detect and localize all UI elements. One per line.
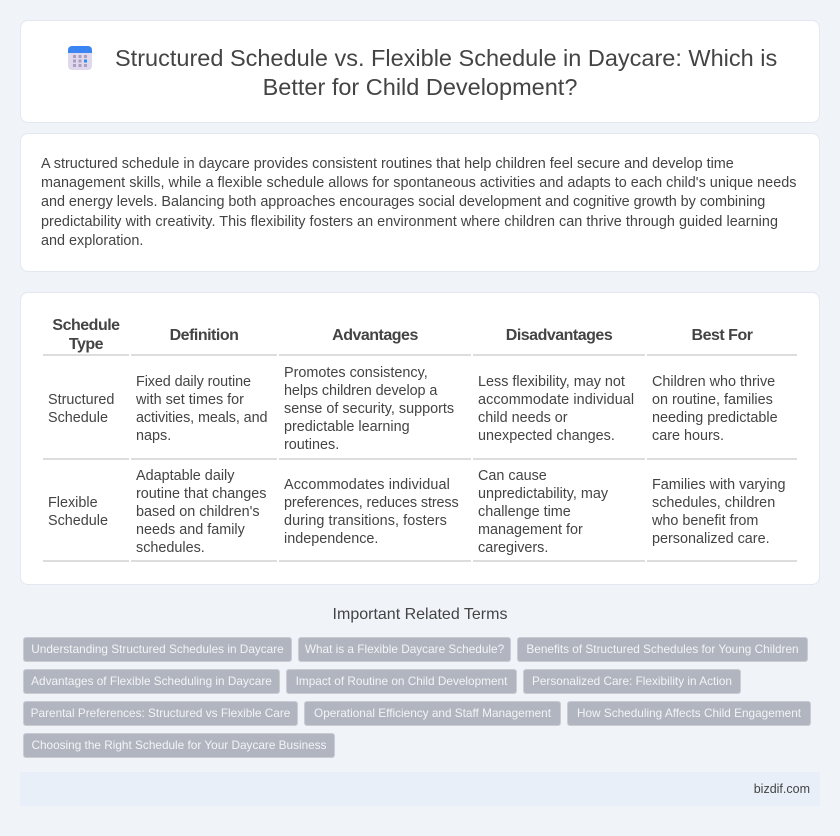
table row: structured schedule: naps. [136, 428, 171, 444]
title: Better for Child Development? [263, 74, 577, 100]
related term tags: Advantages of Flexible Scheduling in Daycare [31, 674, 272, 688]
table row: flexible schedule: preferences, reduces stress [284, 495, 459, 511]
footer bar [20, 772, 820, 806]
table header row: Schedule [52, 317, 120, 334]
table row: structured schedule: needing predictable [652, 410, 778, 426]
table header row: Disadvantages [506, 327, 612, 344]
table row: flexible schedule: based on children's [136, 504, 260, 520]
table row: structured schedule: unexpected changes. [478, 428, 615, 444]
table row: flexible schedule: routine that changes [136, 486, 266, 502]
table row: structured schedule: care hours. [652, 428, 724, 444]
table row: structured schedule: predictable learning [284, 419, 410, 435]
table row: structured schedule: Schedule [48, 410, 108, 426]
table row: flexible schedule: management for [478, 522, 583, 538]
related term tags: Benefits of Structured Schedules for Young Children [526, 642, 799, 656]
intro text: A structured schedule in daycare provides consistent routines that help children feel secure and develop time [41, 156, 734, 172]
table row: flexible schedule: Adaptable daily [136, 468, 234, 484]
footer source text: bizdif.com [754, 782, 810, 796]
table row: flexible schedule [43, 468, 797, 562]
table row: structured schedule: Promotes consistency, [284, 365, 428, 381]
panel: intro paragraph [20, 133, 820, 272]
title [115, 45, 777, 100]
table row: flexible schedule: Families with varying [652, 477, 786, 493]
panel: title header [20, 20, 820, 123]
related terms heading: Important Related Terms [333, 606, 507, 623]
table row: structured schedule: activities, meals, and [136, 410, 267, 426]
table row: structured schedule: Children who thrive [652, 374, 775, 390]
related term tags: Impact of Routine on Child Development [296, 674, 507, 688]
related term tags: Understanding Structured Schedules in Daycare [31, 642, 284, 656]
table row: flexible schedule: during transitions, fosters [284, 513, 447, 529]
table row: structured schedule: routines. [284, 437, 339, 453]
table row: flexible schedule: Can cause [478, 468, 547, 484]
table row: flexible schedule: unpredictability, may [478, 486, 608, 502]
intro text [41, 156, 796, 249]
table row: structured schedule: with set times for [136, 392, 244, 408]
table row: flexible schedule: Schedule [48, 513, 108, 529]
icon: calendar [68, 46, 92, 70]
table row: flexible schedule: needs and family [136, 522, 245, 538]
related term tags [23, 637, 811, 758]
related term tags: How Scheduling Affects Child Engagement [577, 706, 801, 720]
table header row: Type [69, 336, 103, 353]
table row: structured schedule: sense of security, supports [284, 401, 454, 417]
table row: flexible schedule: caregivers. [478, 540, 548, 556]
related term tags: Operational Efficiency and Staff Management [314, 706, 551, 720]
table row: structured schedule: on routine, families [652, 392, 773, 408]
intro text: and exploration. [41, 233, 143, 249]
table header row: Advantages [332, 327, 418, 344]
related term tags: What is a Flexible Daycare Schedule? [305, 642, 504, 656]
table row: structured schedule: Less flexibility, may not [478, 374, 625, 390]
related term tags: Choosing the Right Schedule for Your Daycare Business [31, 738, 327, 752]
table row: flexible schedule: Accommodates individual [284, 477, 450, 493]
intro text: and energy levels. Balancing both approaches encourages social development and cognitive growth by combining [41, 194, 765, 210]
table row: flexible schedule: schedules, children [652, 495, 775, 511]
table header row: Best For [692, 327, 752, 344]
table row: flexible schedule: challenge time [478, 504, 571, 520]
table row: flexible schedule: Flexible [48, 495, 98, 511]
related term tags: Personalized Care: Flexibility in Action [532, 674, 732, 688]
table row: structured schedule: accommodate individual [478, 392, 634, 408]
table header row: Definition [170, 327, 238, 344]
table row: flexible schedule: schedules. [136, 540, 205, 556]
intro text: predictability with creativity. This flexibility fosters an environment where children can thrive through guided learning [41, 214, 778, 230]
table row: structured schedule: Fixed daily routine [136, 374, 251, 390]
title: Structured Schedule vs. Flexible Schedule in Daycare: Which is [115, 45, 777, 71]
table row: flexible schedule: personalized care. [652, 531, 770, 547]
table row: structured schedule [43, 365, 797, 460]
table row: structured schedule: Structured [48, 392, 114, 408]
table row: flexible schedule: independence. [284, 531, 378, 547]
panel: comparison table [20, 292, 820, 585]
table row: structured schedule: helps children develop a [284, 383, 437, 399]
table row: structured schedule: child needs or [478, 410, 568, 426]
related term tags: Parental Preferences: Structured vs Flexible Care [31, 706, 290, 720]
table header row [43, 317, 797, 356]
intro text: management skills, while a flexible schedule allows for spontaneous activities and adapts to each child's unique needs [41, 175, 796, 191]
table row: flexible schedule: who benefit from [652, 513, 758, 529]
